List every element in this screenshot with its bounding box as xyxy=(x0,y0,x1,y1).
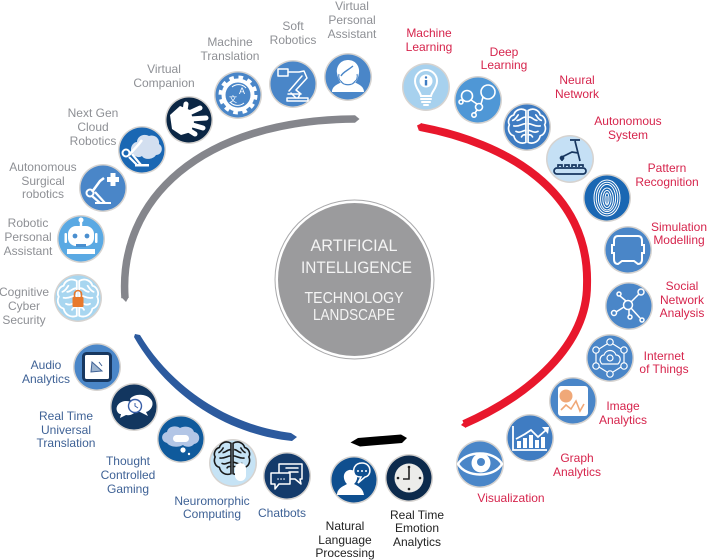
item: Pattern Recognition: Pattern xyxy=(648,161,686,175)
item: Deep Learning: Learning xyxy=(481,58,527,72)
item: Deep Learning: Deep xyxy=(490,45,519,59)
item: Graph Analytics xyxy=(506,414,601,479)
item: Visualization: Visualization xyxy=(477,491,545,505)
item: Robotic Personal Assistant: Robotic xyxy=(8,216,48,230)
item: Autonomous Surgical robotics: Autonomous xyxy=(9,160,77,174)
item: Thought Controlled Gaming: Controlled xyxy=(101,468,155,482)
item: Neural Network: Neural xyxy=(559,73,595,87)
item: Next Gen Cloud Robotics: Cloud xyxy=(77,120,109,134)
item: Neural Network: Network xyxy=(555,87,600,101)
item: Audio Analytics: Analytics xyxy=(22,372,70,386)
item: Real Time Emotion Analytics: Emotion xyxy=(395,521,439,535)
item: Internet of Things: of Things xyxy=(639,362,689,376)
item: Natural Language Processing: Language xyxy=(318,533,372,547)
item: Robotic Personal Assistant: Assistant xyxy=(4,244,53,258)
item: Neuromorphic Computing xyxy=(174,439,257,521)
item: Virtual Companion: Companion xyxy=(133,76,195,90)
item: Machine Learning: Learning xyxy=(406,40,452,54)
item: Cognitive Cyber Security xyxy=(0,274,102,327)
item: Autonomous Surgical robotics: Surgical xyxy=(21,174,65,188)
item: Real Time Universal Translation: Real Time xyxy=(39,409,93,423)
item: Soft Robotics xyxy=(269,19,317,108)
item: Deep Learning xyxy=(454,45,527,124)
arc: blue segment xyxy=(134,334,297,441)
item: Natural Language Processing: Natural xyxy=(326,519,364,533)
item: Autonomous System xyxy=(546,114,662,183)
item: Graph Analytics: Analytics xyxy=(553,465,601,479)
item: Simulation Modelling: Modelling xyxy=(653,233,705,247)
centre title: INTELLIGENCE xyxy=(301,258,412,277)
item: Social Network Analysis xyxy=(605,279,705,330)
item: Thought Controlled Gaming xyxy=(101,415,205,496)
item: Soft Robotics: Soft xyxy=(282,19,304,33)
item: Machine Translation: A xyxy=(239,86,245,96)
item: Autonomous System: System xyxy=(608,128,648,142)
item: Machine Learning xyxy=(402,26,452,111)
item: Soft Robotics: Robotics xyxy=(270,33,316,47)
item: Image Analytics xyxy=(549,377,647,427)
item: Machine Translation: 文 xyxy=(229,94,237,105)
group: black technologies xyxy=(315,454,444,560)
item: Virtual Companion xyxy=(133,62,213,144)
item: Audio Analytics xyxy=(22,343,121,391)
item: Virtual Companion: Virtual xyxy=(147,62,181,76)
item: Machine Translation: Machine xyxy=(207,35,253,49)
item: Real Time Universal Translation: Translation xyxy=(37,436,95,450)
centre title: ARTIFICIAL xyxy=(310,236,398,255)
item: Graph Analytics: Graph xyxy=(560,451,594,465)
item: Machine Translation: Translation xyxy=(201,49,259,63)
item: Cognitive Cyber Security: Security xyxy=(2,313,46,327)
arc: black segment xyxy=(350,434,407,446)
group: red technologies xyxy=(402,26,707,505)
item: Audio Analytics: Audio xyxy=(31,358,62,372)
item: Machine Translation xyxy=(201,35,262,119)
item: Virtual Personal Assistant xyxy=(324,0,377,101)
item: Pattern Recognition xyxy=(583,161,699,222)
item: Next Gen Cloud Robotics: Robotics xyxy=(70,134,116,148)
item: Real Time Emotion Analytics: Real Time xyxy=(390,508,444,522)
item: Autonomous Surgical robotics: robotics xyxy=(22,187,64,201)
item: Machine Learning: Machine xyxy=(406,26,452,40)
item: Real Time Universal Translation: Universal xyxy=(41,423,91,437)
item: Thought Controlled Gaming: Thought xyxy=(106,454,151,468)
item: Virtual Personal Assistant: Personal xyxy=(328,13,376,27)
item: Chatbots: Chatbots xyxy=(258,506,306,520)
item: Robotic Personal Assistant xyxy=(4,215,105,263)
item: Autonomous System: Autonomous xyxy=(594,114,662,128)
item: Social Network Analysis: Analysis xyxy=(660,306,704,320)
item: Social Network Analysis: Social xyxy=(666,279,698,293)
group: blue technologies xyxy=(22,343,311,521)
item: Thought Controlled Gaming: Gaming xyxy=(107,482,149,496)
centre title: TECHNOLOGY xyxy=(304,290,404,307)
item: Simulation Modelling xyxy=(604,220,707,274)
item: Pattern Recognition: Recognition xyxy=(635,175,699,189)
item: Social Network Analysis: Network xyxy=(660,293,705,307)
centre badge xyxy=(274,200,434,360)
arc: grey segment xyxy=(121,115,360,302)
item: Image Analytics: Analytics xyxy=(599,413,647,427)
item: Neuromorphic Computing: Computing xyxy=(183,507,241,521)
item: Internet of Things xyxy=(586,334,689,382)
item: Neural Network xyxy=(503,73,600,151)
item: Next Gen Cloud Robotics: Next Gen xyxy=(68,106,118,120)
item: Neuromorphic Computing: Neuromorphic xyxy=(174,494,250,508)
item: Visualization xyxy=(456,440,545,505)
centre title xyxy=(301,236,412,324)
item: Chatbots xyxy=(258,452,311,520)
item: Cognitive Cyber Security: Cyber xyxy=(8,299,40,313)
item: Cognitive Cyber Security: Cognitive xyxy=(0,285,49,299)
centre title: LANDSCAPE xyxy=(313,307,395,324)
item: Autonomous Surgical robotics xyxy=(9,160,127,212)
item: Virtual Personal Assistant: Assistant xyxy=(328,27,377,41)
item: Image Analytics: Image xyxy=(606,399,640,413)
item: Internet of Things: Internet xyxy=(644,349,685,363)
arc: red segment xyxy=(417,123,587,428)
item: Natural Language Processing xyxy=(315,456,378,560)
item: Real Time Emotion Analytics: Analytics xyxy=(393,535,441,549)
item: Real Time Universal Translation xyxy=(37,383,158,450)
group: grey technologies xyxy=(0,0,377,327)
item: Real Time Emotion Analytics xyxy=(385,454,444,549)
item: Simulation Modelling: Simulation xyxy=(651,220,707,234)
item: Robotic Personal Assistant: Personal xyxy=(4,230,52,244)
item: Next Gen Cloud Robotics xyxy=(68,106,166,174)
item: Natural Language Processing: Processing xyxy=(315,546,375,560)
